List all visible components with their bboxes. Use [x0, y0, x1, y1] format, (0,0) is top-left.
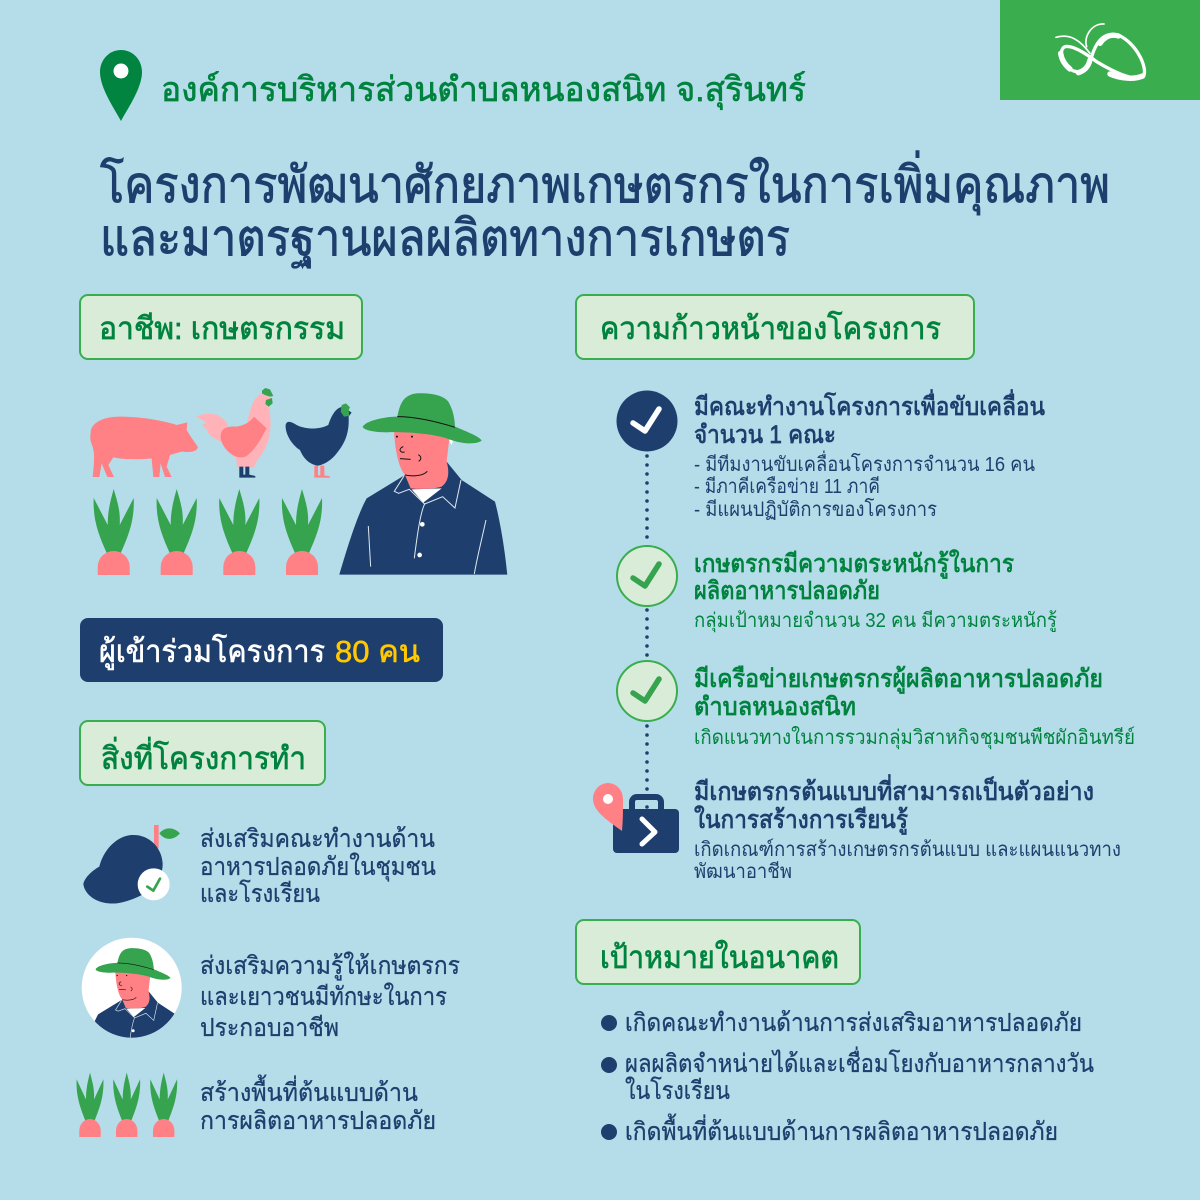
list: future goals: เกิดพื้นที่ต้นแบบด้านการผลิตอาหารปลอดภัย: [625, 1113, 1058, 1146]
icon: rooster: [196, 388, 273, 478]
text: progress 2: เกษตรกรมีความตระหนักรู้ในการ: [694, 549, 1014, 579]
text: progress 4: ในการสร้างการเรียนรู้: [694, 805, 908, 835]
text: progress 4: มีเกษตรกรต้นแบบที่สามารถเป็นตัวอย่าง: [694, 774, 1094, 806]
text: create model area: การผลิตอาหารปลอดภัย: [200, 1107, 436, 1135]
text: progress 1: มีคณะทำงานโครงการเพื่อขับเคลื่อน: [694, 389, 1045, 421]
text: promote knowledge: ประกอบอาชีพ: [200, 1014, 339, 1042]
title: โครงการพัฒนาศักยภาพเกษตรกรในการเพิ่มคุณภาพ: [100, 151, 1110, 215]
heading: occupation: [80, 295, 362, 359]
illustration: farm animals, carrots and farmer: [90, 388, 507, 575]
text: promote working group: อาหารปลอดภัยในชุมชน: [200, 852, 436, 882]
text: progress 2: ผลิตอาหารปลอดภัย: [694, 577, 880, 605]
text: progress 4: พัฒนาอาชีพ: [694, 861, 792, 883]
text: progress 3: เกิดแนวทางในการรวมกลุ่มวิสาหกิจชุมชนพืชผักอินทรีย์: [694, 726, 1135, 750]
heading: occupation: อาชีพ: เกษตรกรรม: [99, 311, 345, 346]
text: progress 1: - มีภาคีเครือข่าย 11 ภาคี: [694, 476, 880, 498]
participants banner: 80 คน: [335, 634, 420, 669]
participants banner: [80, 618, 443, 682]
icon: small carrots: [77, 1072, 177, 1137]
text: promote working group: ส่งเสริมคณะทำงานด้าน: [200, 825, 435, 853]
text: progress 1: - มีทีมงานขับเคลื่อนโครงการจำนวน 16 คน: [694, 450, 1035, 476]
text: promote working group: และโรงเรียน: [200, 879, 320, 908]
organisation name: องค์การบริหารส่วนตำบลหนองสนิท จ.สุรินทร์: [161, 71, 806, 110]
heading: future goals: เป้าหมายในอนาคต: [600, 940, 839, 975]
list: future goals: [601, 1009, 1094, 1146]
icon: farmer portrait: [82, 938, 182, 1038]
icon: location pin: [100, 50, 142, 121]
timeline connector: [645, 456, 649, 812]
icon: check green 1: [617, 546, 677, 606]
participants banner: ผู้เข้าร่วมโครงการ: [99, 634, 325, 670]
list: future goals: ผลผลิตจำหน่ายได้และเชื่อมโยงกับอาหารกลางวัน: [625, 1046, 1094, 1078]
heading: project progress: ความก้าวหน้าของโครงการ: [600, 311, 941, 346]
text: promote knowledge: [200, 951, 460, 1042]
icon: briefcase with pin: [593, 783, 679, 853]
icon: pig: [90, 417, 198, 477]
text: promote knowledge: ส่งเสริมความรู้ให้เกษตรกร: [200, 951, 460, 981]
list: future goals: ในโรงเรียน: [625, 1076, 730, 1105]
list: future goals: เกิดคณะทำงานด้านการส่งเสริมอาหารปลอดภัย: [625, 1009, 1082, 1037]
text: progress 1: [694, 389, 1045, 521]
text: progress 3: ตำบลหนองสนิท: [694, 693, 856, 721]
text: progress 4: เกิดเกณฑ์การสร้างเกษตรกรต้นแบบ และแผนแนวทาง: [694, 838, 1121, 861]
title: [100, 151, 1110, 268]
icon: carrots row: [94, 489, 322, 575]
text: create model area: สร้างพื้นที่ต้นแบบด้าน: [200, 1074, 418, 1107]
icon: mango with check: [83, 825, 180, 904]
title: และมาตรฐานผลผลิตทางการเกษตร: [100, 210, 790, 268]
text: progress 3: [694, 665, 1135, 750]
text: create model area: [200, 1074, 436, 1135]
text: progress 2: กลุ่มเป้าหมายจำนวน 32 คน มีความตระหนักรู้: [694, 610, 1057, 633]
icon: check green 2: [617, 661, 677, 721]
icon: check navy: [616, 390, 678, 452]
heading: what the project does: [80, 721, 325, 785]
icon: hen: [286, 403, 352, 478]
logo badge: [1000, 0, 1200, 100]
heading: what the project does: สิ่งที่โครงการทำ: [101, 737, 306, 776]
text: promote working group: [200, 825, 436, 908]
icon: farmer: [339, 393, 507, 575]
heading: future goals: [576, 920, 860, 984]
text: promote knowledge: และเยาวชนมีทักษะในการ: [200, 982, 447, 1011]
text: progress 2: [694, 549, 1057, 633]
text: progress 4: [694, 774, 1121, 883]
text: progress 1: จำนวน 1 คณะ: [694, 421, 836, 449]
text: progress 1: - มีแผนปฏิบัติการของโครงการ: [694, 498, 937, 521]
heading: project progress: [576, 295, 974, 359]
text: progress 3: มีเครือข่ายเกษตรกรผู้ผลิตอาหารปลอดภัย: [694, 665, 1103, 694]
